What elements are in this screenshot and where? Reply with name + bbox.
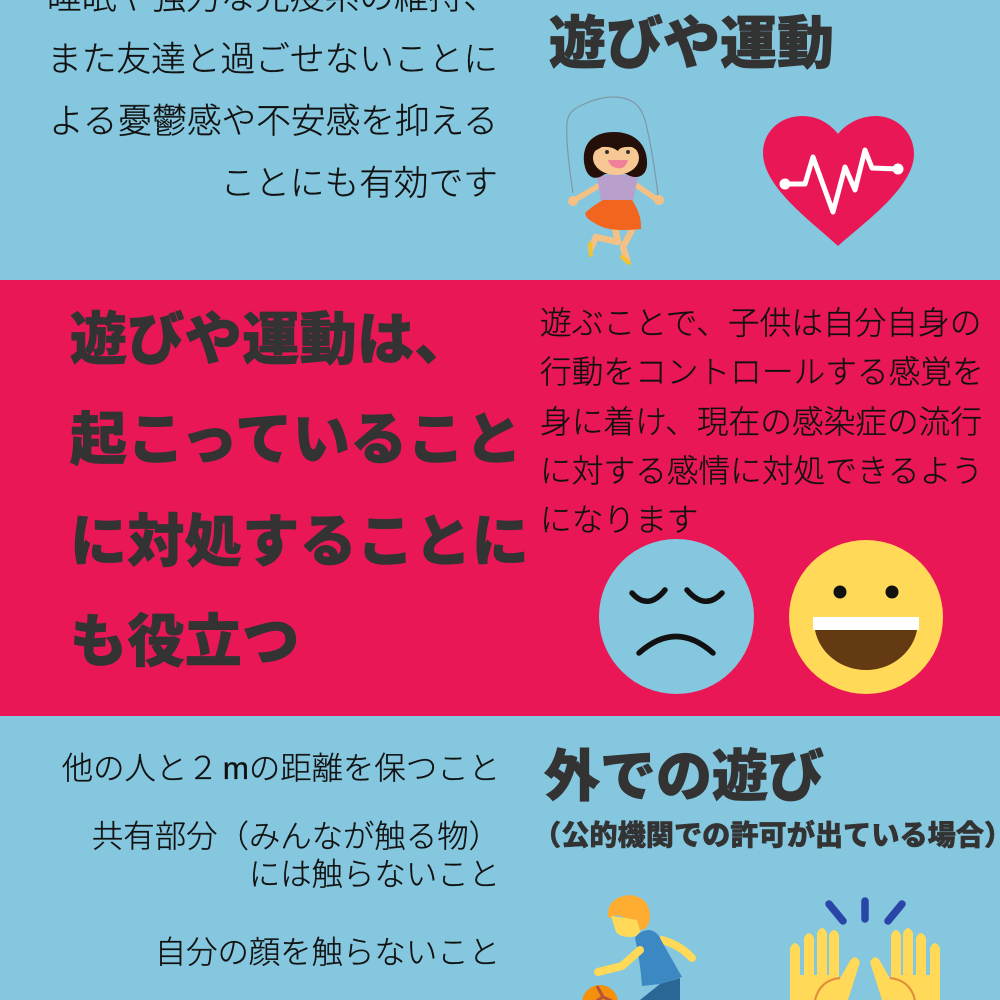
icon: raised clapping hands (790, 897, 940, 1000)
heading: play and exercise: 遊びや運動 (549, 12, 834, 76)
panel heading: play helps cope with events: 起こっていること (70, 408, 522, 472)
heading: outdoor play: 外での遊び (544, 745, 824, 808)
icon: heart with pulse line (763, 116, 914, 246)
panel body text: 遊ぶことで、子供は自分自身の (540, 305, 981, 341)
panel body text: になります (540, 502, 698, 538)
safety rules text: 他の人と２mの距離を保つこと (62, 751, 500, 786)
panel: play helps cope (0, 280, 1000, 716)
panel body text (540, 305, 984, 538)
body text: sleep and mood benefits: ことにも有効です (220, 165, 498, 203)
panel heading: play helps cope with events: に対処することに (70, 510, 529, 574)
panel body text: に対する感情に対処できるよう (540, 453, 983, 489)
icon: girl skipping rope (566, 96, 664, 266)
safety rules text: 共有部分（みんなが触る物） (92, 819, 500, 854)
icon: child dribbling ball (582, 895, 696, 1000)
subheading: if permitted: （公的機関での許可が出ている場合） (533, 819, 1000, 851)
panel heading: play helps cope with events (70, 308, 529, 674)
safety rules text: 自分の顔を触らないこと (155, 935, 500, 970)
body text: sleep and mood benefits: よる憂鬱感や不安感を抑える (49, 103, 498, 141)
body text: sleep and mood benefits (47, 0, 498, 203)
icon: sad face (599, 539, 754, 694)
panel heading: play helps cope with events: も役立つ (70, 610, 300, 674)
body text: sleep and mood benefits: また友達と過ごせないことに (47, 41, 498, 79)
panel body text: 行動をコントロールする感覚を (540, 354, 984, 390)
panel body text: 身に着け、現在の感染症の流行 (540, 404, 982, 440)
safety rules text (62, 751, 500, 970)
icon: laughing face (789, 540, 943, 694)
safety rules text: には触らないこと (249, 857, 500, 892)
panel heading: play helps cope with events: 遊びや運動は、 (70, 308, 472, 372)
